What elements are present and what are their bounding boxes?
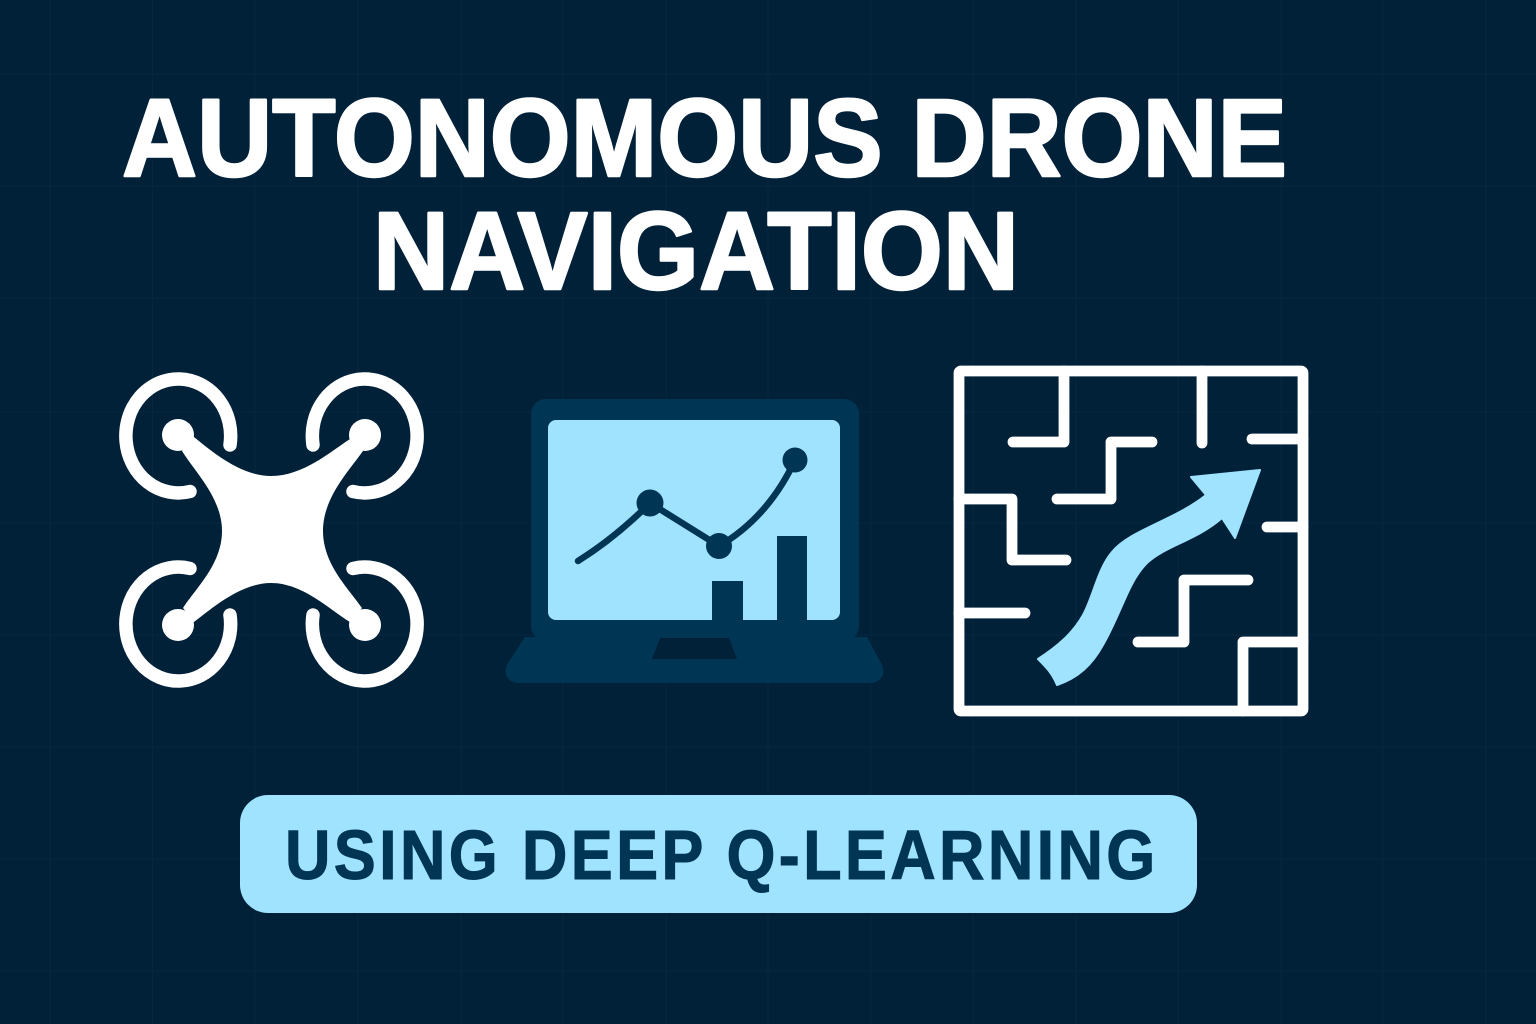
drone body bbox=[182, 437, 363, 622]
maze walls bbox=[959, 371, 1303, 711]
title line 2: NAVIGATION bbox=[373, 190, 1019, 313]
title line 1: AUTONOMOUS DRONE bbox=[122, 77, 1287, 200]
subtitle text: USING DEEP Q-LEARNING bbox=[285, 817, 1155, 895]
line chart bbox=[578, 448, 808, 561]
path arrow bbox=[1038, 470, 1260, 685]
drone rotor rings bbox=[126, 379, 417, 681]
drone motor hubs bbox=[162, 419, 381, 641]
icon: quadcopter drone bbox=[126, 379, 417, 681]
laptop lid bbox=[531, 399, 859, 641]
icon: laptop with chart bbox=[506, 399, 883, 683]
bar chart bbox=[712, 536, 807, 621]
laptop base bbox=[506, 637, 883, 683]
icon: maze with path arrow bbox=[959, 371, 1303, 711]
subtitle pill bbox=[240, 795, 1197, 913]
laptop screen bbox=[548, 420, 840, 620]
pill background bbox=[240, 795, 1197, 913]
laptop trackpad notch bbox=[652, 638, 737, 659]
title bbox=[122, 77, 1287, 313]
